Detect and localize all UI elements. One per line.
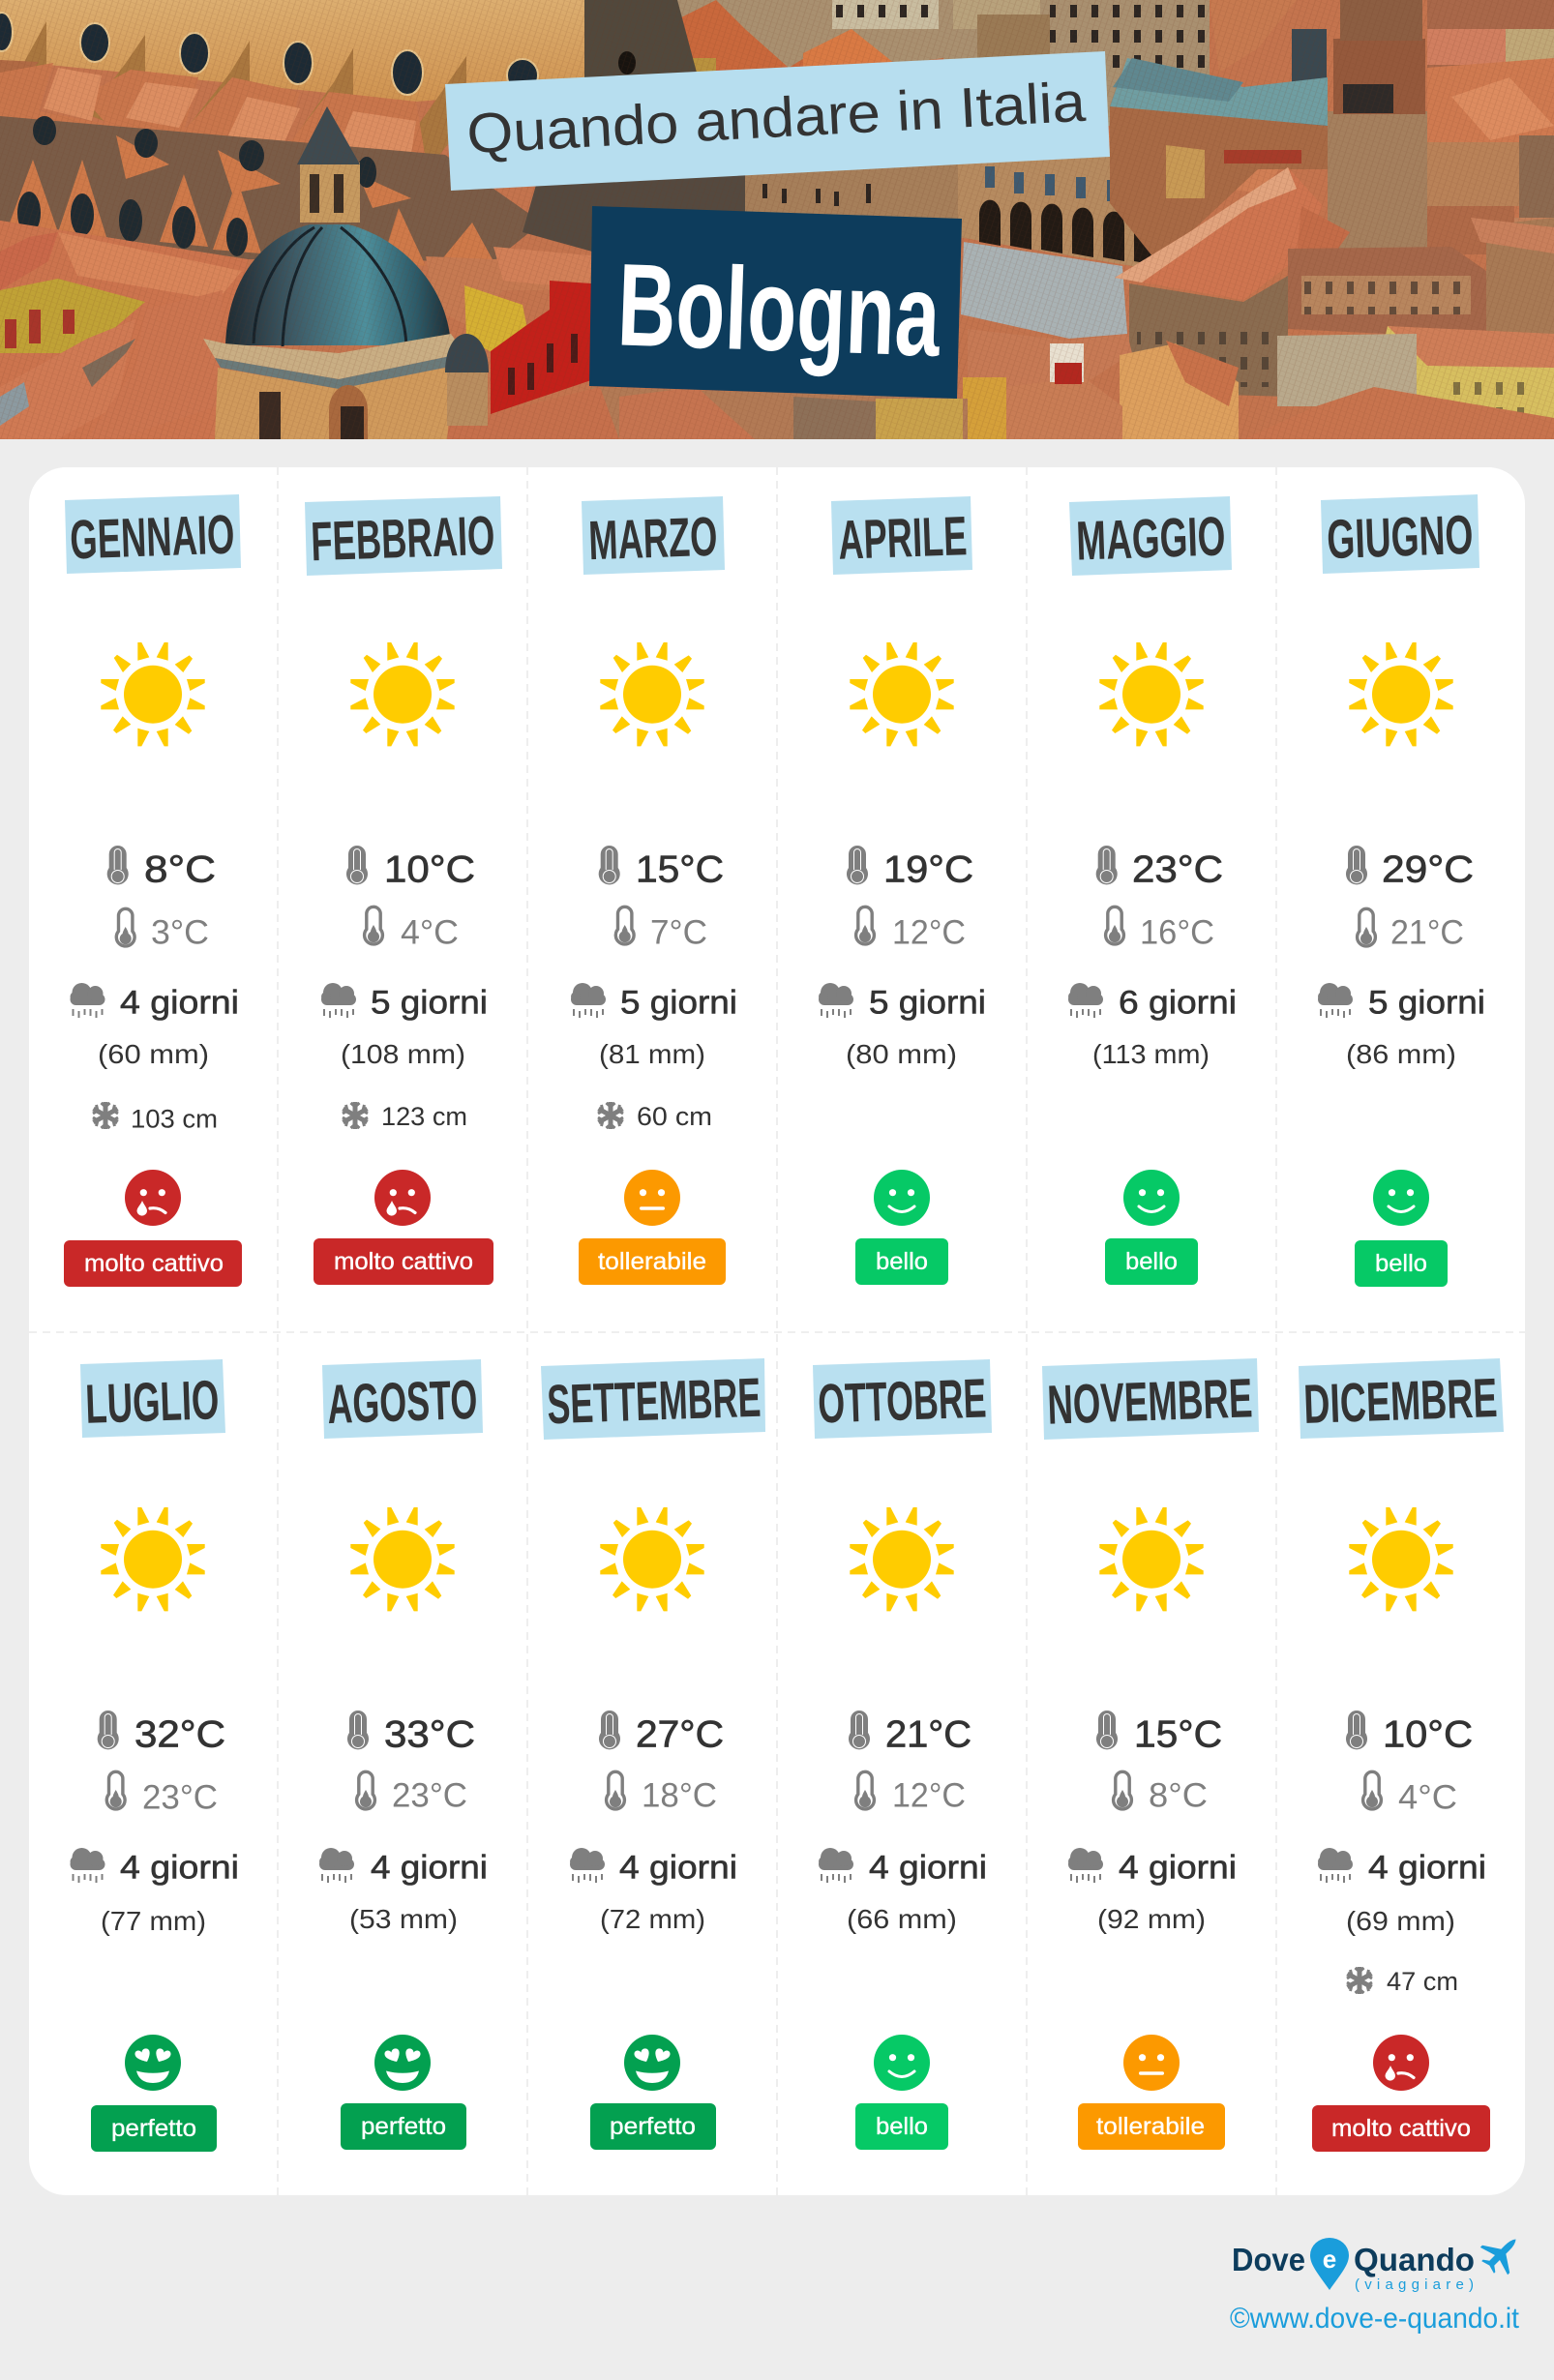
icon: rain: [1318, 983, 1353, 1018]
rainy days: 5 giorni: [869, 985, 986, 1022]
logo: Dove e Quando viaggiare: Dove: [1232, 2242, 1305, 2277]
piazza: [961, 242, 1127, 339]
icon: sun: [600, 1507, 704, 1611]
rating badge: [855, 2103, 948, 2150]
icon: very bad face: [125, 1170, 181, 1226]
rating badge: molto cattivo: [1331, 2115, 1471, 2142]
rating badge: perfetto: [111, 2115, 196, 2142]
icon: perfect face: [125, 2035, 181, 2091]
min temperature: 23°C: [142, 1779, 218, 1817]
icon: snow: [1347, 1967, 1372, 1994]
right tower: [1328, 111, 1427, 256]
rainfall: (69 mm): [1346, 1906, 1455, 1936]
icon: sun: [1349, 642, 1453, 746]
icon: rain: [1318, 1848, 1353, 1883]
rating badge: [314, 1238, 493, 1285]
icon: snow: [598, 1102, 623, 1129]
snowfall: 103 cm: [131, 1105, 218, 1134]
icon: sun: [1099, 642, 1204, 746]
rating badge: bello: [876, 2113, 928, 2140]
title text: Quando andare in Italia: [465, 71, 1088, 165]
gothic band: [0, 116, 542, 261]
icon: rain: [819, 1848, 853, 1883]
rating badge: molto cattivo: [334, 1248, 473, 1275]
rating badge: bello: [876, 1248, 928, 1275]
icon: thermometer low: [357, 1771, 374, 1809]
red building: [491, 281, 591, 414]
max temperature: 15°C: [1134, 1714, 1222, 1756]
icon: rain: [70, 983, 105, 1018]
icon: sun: [1099, 1507, 1204, 1611]
min temperature: 7°C: [650, 914, 707, 952]
min temperature: 16°C: [1140, 914, 1214, 952]
rainfall: (92 mm): [1097, 1904, 1206, 1934]
icon: thermometer high: [98, 1711, 119, 1749]
month label: [813, 1359, 992, 1439]
rainfall: (77 mm): [101, 1906, 206, 1936]
logo: Dove e Quando viaggiare: [1232, 2225, 1530, 2293]
icon: sun: [850, 642, 954, 746]
icon: location pin: [1310, 2238, 1349, 2290]
month label: [80, 1359, 225, 1438]
dark tower: [584, 0, 697, 77]
month label: APRILE: [837, 505, 968, 572]
rainfall: (81 mm): [599, 1039, 705, 1069]
panel: maggio: [1068, 496, 1237, 1285]
month label: NOVEMBRE: [1046, 1367, 1253, 1437]
rating badge: bello: [1125, 1248, 1178, 1275]
rainfall: (53 mm): [349, 1904, 458, 1934]
logo: Dove e Quando viaggiare: e: [1323, 2245, 1336, 2274]
icon: thermometer low: [856, 907, 874, 944]
rainfall: (80 mm): [846, 1039, 957, 1069]
icon: rain: [1068, 1848, 1103, 1883]
snowfall: 60 cm: [637, 1102, 712, 1131]
icon: snow: [343, 1102, 368, 1129]
icon: thermometer low: [1358, 908, 1375, 946]
icon: sun: [600, 642, 704, 746]
month label: AGOSTO: [326, 1369, 478, 1436]
rainy days: 4 giorni: [120, 985, 239, 1022]
rainfall: (60 mm): [98, 1039, 209, 1069]
month label: [541, 1358, 765, 1440]
min temperature: 8°C: [1149, 1777, 1208, 1815]
title band: [445, 51, 1110, 191]
icon: thermometer low: [607, 1771, 624, 1809]
month label: [582, 496, 725, 575]
min temperature: 23°C: [392, 1777, 467, 1815]
month label: [1321, 494, 1479, 574]
icon: tolerable face: [624, 1170, 680, 1226]
rating badge: perfetto: [361, 2113, 446, 2140]
panel: dicembre: [1299, 1358, 1504, 2152]
rainy days: 4 giorni: [371, 1850, 488, 1887]
icon: thermometer low: [106, 1771, 125, 1809]
panel: giugno: [1318, 494, 1485, 1287]
panel: gennaio: [64, 494, 242, 1287]
top centre city blocks: [677, 0, 1327, 192]
icon: perfect face: [374, 2035, 431, 2091]
icon: rain: [321, 983, 356, 1018]
logo: Dove e Quando viaggiare: Quando: [1354, 2242, 1475, 2277]
icon: thermometer high: [107, 846, 129, 884]
month label: [65, 494, 241, 574]
roof tile texture: [0, 0, 1554, 439]
icon: very bad face: [374, 1170, 431, 1226]
rainfall: (66 mm): [847, 1904, 957, 1934]
rainy days: 5 giorni: [371, 985, 488, 1022]
icon: thermometer low: [615, 907, 634, 944]
icon: rain: [1068, 983, 1103, 1018]
max temperature: 8°C: [144, 849, 216, 891]
rating badge: tollerabile: [598, 1248, 706, 1275]
icon: rain: [319, 1848, 354, 1883]
rainfall: (113 mm): [1092, 1039, 1210, 1069]
icon: perfect face: [624, 2035, 680, 2091]
icon: thermometer low: [116, 908, 134, 946]
icon: very bad face: [1373, 2035, 1429, 2091]
icon: sun: [350, 642, 455, 746]
icon: thermometer high: [1346, 1711, 1367, 1749]
panel: febbraio: [305, 496, 502, 1285]
icon: sun: [101, 1507, 205, 1611]
under Bologna block: [590, 387, 968, 439]
panel: novembre: [1042, 1358, 1259, 2150]
photo: aerial view of Bologna rooftops: [0, 0, 1554, 439]
panel: agosto: [319, 1359, 488, 2150]
rainfall: (86 mm): [1346, 1039, 1456, 1069]
min temperature: 12°C: [892, 914, 966, 952]
website credit: ©www.dove-e-quando.it: [1230, 2303, 1520, 2335]
max temperature: 32°C: [134, 1714, 225, 1756]
icon: snow: [93, 1102, 118, 1129]
min temperature: 4°C: [1398, 1779, 1457, 1817]
icon: thermometer low: [1114, 1771, 1131, 1809]
rainy days: 4 giorni: [869, 1850, 987, 1887]
rainy days: 5 giorni: [1368, 985, 1485, 1022]
rating badge: [1078, 2103, 1225, 2150]
min temperature: 3°C: [151, 914, 209, 952]
icon: thermometer high: [849, 1711, 870, 1749]
month label: MARZO: [587, 506, 718, 572]
month label: [322, 1359, 483, 1439]
month label: [1042, 1358, 1259, 1440]
city name block: [589, 206, 962, 399]
right edge buildings: [1427, 0, 1554, 68]
rating badge: perfetto: [610, 2113, 696, 2140]
rating badge: molto cattivo: [84, 1250, 224, 1277]
right building below roof: [1129, 276, 1288, 397]
min temperature: 12°C: [892, 1777, 966, 1815]
max temperature: 29°C: [1382, 849, 1474, 891]
icon: tolerable face: [1123, 2035, 1180, 2091]
rating badge: [1355, 1240, 1448, 1287]
month label: LUGLIO: [84, 1369, 220, 1436]
icon: thermometer high: [1346, 846, 1367, 884]
rating badge: [91, 2105, 217, 2152]
max temperature: 33°C: [384, 1714, 475, 1756]
min temperature: 18°C: [642, 1777, 717, 1815]
icon: sun: [350, 1507, 455, 1611]
panel: calendar card: [29, 467, 1525, 2195]
rainy days: 5 giorni: [620, 985, 737, 1022]
rating badge: [64, 1240, 242, 1287]
icon: thermometer low: [1363, 1771, 1381, 1809]
month label: GENNAIO: [69, 504, 235, 571]
icon: sun: [850, 1507, 954, 1611]
rainy days: 4 giorni: [120, 1850, 239, 1887]
max temperature: 10°C: [384, 849, 475, 891]
icon: rain: [819, 983, 853, 1018]
panel: marzo: [571, 496, 737, 1285]
icon: thermometer low: [1106, 907, 1123, 944]
yellow building lower right: [1386, 326, 1554, 418]
nave roofs: [0, 60, 39, 73]
panel: luglio: [70, 1359, 239, 2152]
dome: [203, 106, 489, 439]
icon: thermometer high: [1096, 846, 1118, 884]
min temperature: 21°C: [1390, 914, 1464, 952]
icon: thermometer high: [599, 1711, 620, 1749]
rating badge: [590, 2103, 716, 2150]
month label: [305, 496, 502, 576]
icon: sun: [101, 642, 205, 746]
rating badge: [579, 1238, 726, 1285]
icon: rain: [570, 1848, 605, 1883]
icon: thermometer low: [856, 1771, 874, 1809]
month label: [831, 496, 972, 575]
min temperature: 4°C: [401, 914, 459, 952]
nave wall: [0, 0, 600, 102]
rainy days: 4 giorni: [1368, 1850, 1486, 1887]
rating badge: tollerabile: [1096, 2113, 1205, 2140]
snowfall: 47 cm: [1387, 1967, 1458, 1996]
icon: thermometer high: [599, 846, 620, 884]
month label: SETTEMBRE: [546, 1367, 762, 1436]
icon: thermometer low: [365, 907, 382, 944]
orange houses lower centre: [1124, 334, 1132, 353]
rainfall: (108 mm): [341, 1039, 465, 1069]
city name: Bologna: [615, 238, 943, 381]
month label: [1069, 496, 1232, 576]
max temperature: 21°C: [885, 1714, 971, 1756]
max temperature: 15°C: [636, 849, 724, 891]
month label: GIUGNO: [1326, 504, 1474, 571]
icon: good face: [1123, 1170, 1180, 1226]
icon: thermometer high: [1096, 1711, 1118, 1749]
month label: MAGGIO: [1075, 505, 1226, 573]
nave round windows: [0, 13, 538, 95]
max temperature: 27°C: [636, 1714, 724, 1756]
icon: sun: [1349, 1507, 1453, 1611]
icon: good face: [1373, 1170, 1429, 1226]
max temperature: 10°C: [1383, 1714, 1473, 1756]
month label: OTTOBRE: [817, 1367, 987, 1436]
icon: good face: [874, 1170, 930, 1226]
rainy days: 6 giorni: [1119, 985, 1237, 1022]
rating badge: bello: [1375, 1250, 1427, 1277]
rating badge: [1105, 1238, 1198, 1285]
palace brick and teal roof: [1110, 106, 1328, 261]
icon: thermometer high: [346, 846, 368, 884]
big roof: [1115, 167, 1323, 300]
icon: rain: [571, 983, 606, 1018]
max temperature: 23°C: [1132, 849, 1223, 891]
snowfall: 123 cm: [381, 1102, 467, 1131]
logo: Dove e Quando viaggiare: (viaggiare): [1355, 2276, 1474, 2293]
rainfall: (72 mm): [600, 1904, 705, 1934]
rainy days: 4 giorni: [1119, 1850, 1237, 1887]
rainy days: 4 giorni: [619, 1850, 737, 1887]
icon: thermometer high: [347, 1711, 369, 1749]
panel: aprile: [819, 496, 986, 1285]
rating badge: [1312, 2105, 1490, 2152]
max temperature: 19°C: [883, 849, 973, 891]
lower left roofs: [0, 221, 248, 259]
buttresses: [25, 21, 466, 155]
icon: thermometer high: [847, 846, 868, 884]
icon: good face: [874, 2035, 930, 2091]
month label: FEBBRAIO: [310, 505, 495, 573]
rating badge: [341, 2103, 466, 2150]
arcade palace: [958, 149, 1140, 266]
dark gothic wall under title: [523, 175, 745, 252]
rating badge: [855, 1238, 948, 1285]
panel: ottobre: [813, 1359, 992, 2150]
mid roofs right of dome: [426, 256, 495, 261]
icon: rain: [70, 1848, 105, 1883]
icon: plane: [1474, 2225, 1530, 2281]
panel: settembre: [541, 1358, 765, 2150]
